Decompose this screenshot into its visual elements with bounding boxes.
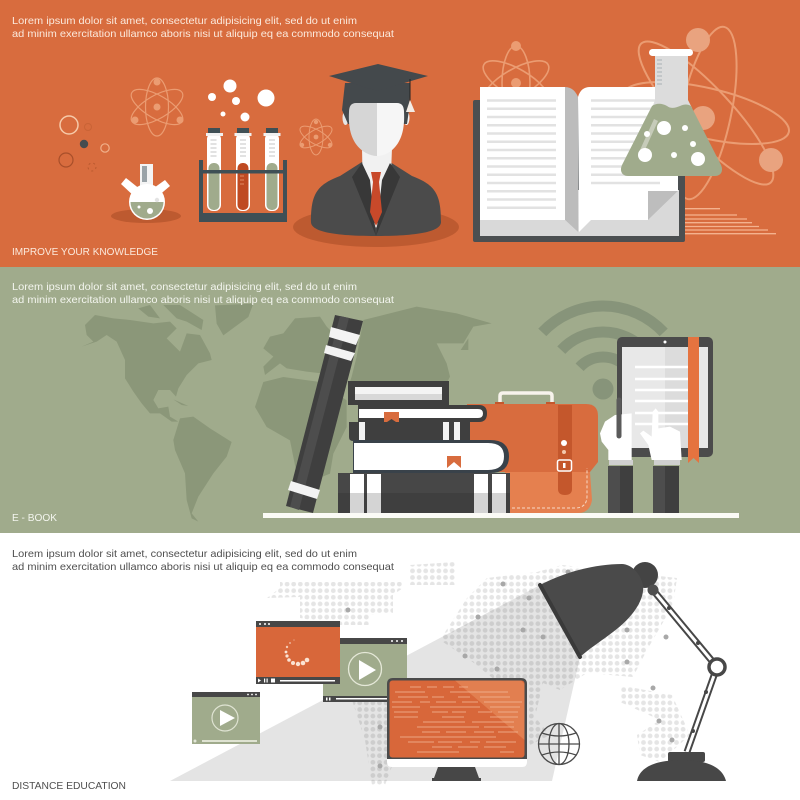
- lamp base: [637, 752, 726, 781]
- intro text: bottom panel: ad minim exercitation ullamco aboris nisi ut aliquip eq ea commodo consequat: [12, 561, 394, 573]
- test tube: green left: [206, 128, 223, 211]
- intro text: middle panel: ad minim exercitation ullamco aboris nisi ut aliquip eq ea commodo consequat: [12, 294, 394, 306]
- illustration: open book: [473, 87, 685, 242]
- illustration: briefcase: [467, 393, 598, 513]
- intro text: top panel: Lorem ipsum dolor sit amet, consectetur adipisicing elit, sed do ut enim: [12, 15, 357, 27]
- decorative stepped lines: [685, 209, 776, 234]
- icon: large atom: [618, 22, 794, 204]
- intro text: top panel: ad minim exercitation ullamco aboris nisi ut aliquip eq ea commodo consequat: [12, 28, 394, 40]
- heading: e-book: E - BOOK: [12, 512, 57, 524]
- text lines: right page: [591, 100, 660, 183]
- chart: dotted world map: [260, 555, 700, 790]
- icon: bubbles: [208, 80, 274, 122]
- lamp shade: [540, 562, 658, 657]
- illustration: tablet: [617, 337, 713, 463]
- loading spinner: [285, 639, 309, 666]
- heading: distance education: DISTANCE EDUCATION: [12, 780, 126, 792]
- icon: atom small left: [126, 78, 188, 136]
- lamp arm: [653, 590, 717, 752]
- illustration: leaning book: [286, 315, 363, 513]
- panel: e-book: [0, 267, 800, 533]
- map markers: [346, 570, 674, 768]
- test tube: green right: [264, 128, 280, 211]
- illustration: desk lamp: [540, 562, 726, 781]
- code lines on screen: [392, 687, 522, 752]
- book: white rounded with bookmark: [358, 405, 487, 424]
- icon: round bottom flask: [111, 164, 181, 223]
- illustration: book stack: [338, 381, 510, 513]
- panel: improve your knowledge: [0, 0, 800, 267]
- book: dark with stripes: [349, 422, 470, 441]
- icon: floating circles: [59, 116, 109, 171]
- illustration: erlenmeyer flask: [621, 49, 722, 176]
- icon: globe: [538, 724, 580, 764]
- illustration: monitor: [387, 678, 527, 781]
- video window: small green: [192, 692, 260, 744]
- icon: wifi signal: [542, 306, 664, 400]
- book: bottom dark with bands: [338, 473, 510, 513]
- icon: reading hands: [600, 400, 682, 513]
- icon: test tube rack: [199, 128, 287, 222]
- panel: distance education: [12, 550, 727, 789]
- chart: world map background: [82, 304, 492, 522]
- bookmark ribbon: [688, 337, 699, 463]
- intro text: middle panel: Lorem ipsum dolor sit amet, consectetur adipisicing elit, sed do ut enim: [12, 281, 357, 293]
- illustration: graduate: [293, 64, 459, 247]
- intro text: top panel: [12, 15, 394, 40]
- heading: improve your knowledge: IMPROVE YOUR KNOWLEDGE: [12, 246, 158, 258]
- video window: orange with loader: [256, 621, 340, 684]
- shelf: [263, 513, 739, 518]
- book: top dark: [348, 381, 449, 405]
- text lines: left page: [487, 100, 556, 208]
- intro text: middle panel: [12, 281, 394, 306]
- intro text: bottom panel: Lorem ipsum dolor sit amet, consectetur adipisicing elit, sed do ut enim: [12, 548, 357, 560]
- video window: green with play: [323, 638, 407, 702]
- book: large white with bookmark: [353, 440, 509, 473]
- intro text: bottom panel: [12, 548, 394, 573]
- test tube: red centre: [234, 128, 252, 211]
- icon: atom near graduate: [297, 119, 335, 155]
- light cone from lamp: [170, 585, 580, 781]
- icon: atom behind book: [477, 41, 555, 120]
